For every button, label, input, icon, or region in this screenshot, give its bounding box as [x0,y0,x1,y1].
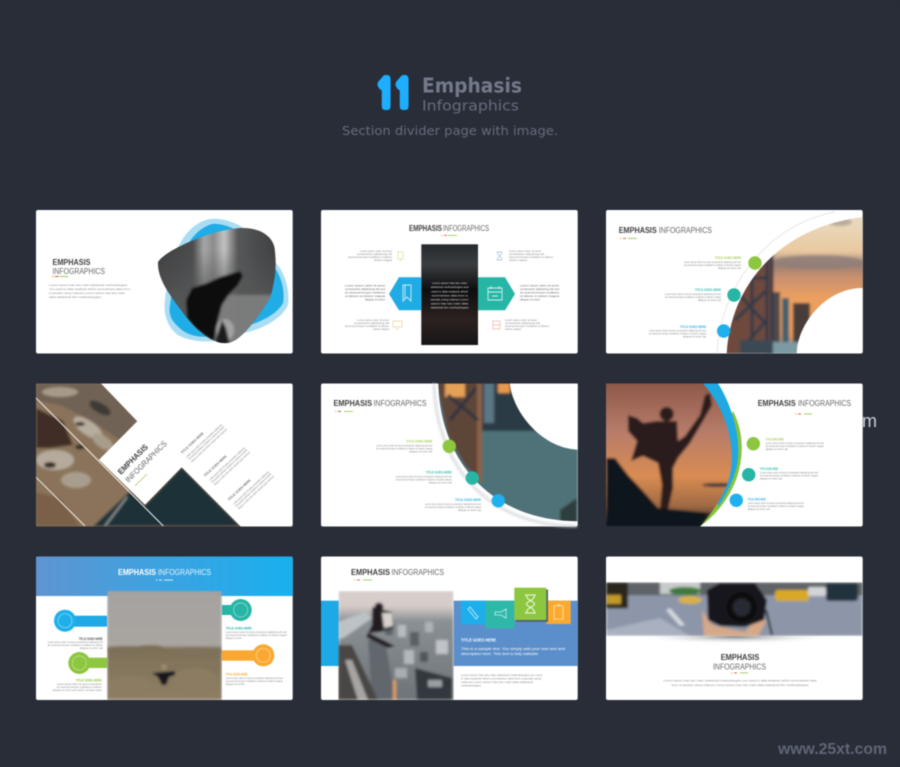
big number 11: 11 [376,76,412,112]
slide 9: camera banner [606,556,863,700]
title: EMPHASIS [721,653,760,662]
left text blocks: do eiusmod tempor incididunt ut labore [57,685,102,689]
card background [321,556,578,700]
body text [461,673,542,688]
right text blocks: dolore magna [509,258,527,262]
title: EMPHASIS [334,399,373,408]
accent ticks [335,410,353,413]
title: EMPHASIS [52,258,91,267]
slide 2: hexagons: INFOGRAPHICS [443,224,489,233]
item 1: TITLE GOES HERE [406,440,433,444]
right text blocks: consectetur adipiscing elit [509,252,544,256]
item 2: aliqua ut enim ad [760,476,782,480]
card background [321,384,578,526]
heading Emphasis: Emphasis [422,74,522,98]
body text: from a sample using indexes Lorem ipsum has two main data statistical thin methodologies [672,683,809,687]
orange tab with circle [222,644,274,666]
item 2: aliqua ut enim ad [698,298,721,302]
item 2: do eiusmod tempor incididunt ut labore et dolore magna [665,295,721,299]
rotated text blocks: do eiusmod tempor incididunt ut labore et dolore [234,472,272,508]
accent ticks [731,672,748,674]
rotated text blocks: TITLE GOES HERE [180,431,205,455]
photo text: used to data analysis which [431,290,468,294]
right text blocks: dolore magna [505,327,521,331]
white circle cutout [797,288,863,354]
body text: Lorem ipsum has two main statistical methodologies. [49,283,128,287]
photo text: sample using indexes Lorem [431,298,469,302]
photo text: statistical thin methodologies [431,306,469,310]
accent ticks [441,234,457,237]
slide 1: dog blob [36,210,293,354]
thin outer arc [717,212,835,353]
left text blocks: TITLE GOES HERE [76,678,102,682]
slide 5: bridge and water arc [321,380,580,526]
rotated text blocks: do eiusmod tempor incididunt ut labore et dolore [187,425,225,461]
band text: TITLE GOES HERE [461,638,496,642]
left text blocks [48,637,103,692]
rotated text blocks: Lorem ipsum dolor sit amet consectetur adipiscing [208,446,246,482]
accent ticks [354,578,372,581]
body text [664,678,817,687]
blue hexagon with bookmark icon [389,277,421,310]
right text blocks [505,249,559,331]
left text blocks: Lorem ipsum dolor sit amet [357,318,389,322]
band text: This is a sample text. You simply add your own text and [461,647,566,651]
rotated text blocks: aliqua ut enim ad minim veniam quis nostrud [213,450,251,486]
blue tab with circle [54,610,107,632]
item 3 [730,494,804,511]
title: EMPHASIS [118,568,157,577]
stray watermark letter: m [862,411,877,431]
photo: bridge and sunset [720,215,865,355]
slide 8: city rooftop: INFOGRAPHICS [392,568,444,577]
item 1 [376,440,456,454]
blue blob [165,219,288,341]
item 1: do eiusmod tempor incididunt ut labore et dolore magna [766,444,824,448]
item 3: Lorem ipsum dolor sit amet consectetur adipiscing elit sed [748,501,804,505]
body text: indexes Lorem ipsum has two main data statistical [461,680,533,684]
rotated text blocks: TITLE GOES HERE [227,478,252,502]
card background [36,384,293,526]
slide 6: dancer: INFOGRAPHICS [798,399,851,408]
accent ticks [156,579,173,582]
photo: coast [35,382,241,528]
card background [36,556,293,700]
body text: data statistical thin methodologies [49,295,102,299]
rotated text blocks: do eiusmod tempor incididunt ut labore et dolore [210,448,248,484]
left text blocks: Lorem ipsum dolor sit amet [360,249,392,253]
body text: a sample using indexes Lorem ipsum has two main [49,291,125,295]
photo: bridge and water [430,380,580,525]
right text blocks: do eiusmod tempor incididunt ut labore et dolore magna [226,679,283,683]
rotated text blocks: TITLE GOES HERE [203,454,228,478]
left text blocks: TITLE GOES HERE [79,637,103,641]
photo text: summarizes data from a [432,294,468,298]
photo text: statistical methodologies and [431,285,469,289]
item 3: do eiusmod tempor incididunt ut labore et dolore magna [649,332,706,336]
left text blocks: ut labore et dolore magna [345,294,385,298]
item 2: TITLE GOES HERE [695,288,722,292]
teal tab with circle [222,599,252,621]
photo: dancer silhouette [605,382,733,528]
arc shadow [434,384,577,526]
left text blocks: do eiusmod tempor incididunt ut labore et dolore [48,643,103,647]
slide 8: city rooftop [321,556,578,700]
item 1: aliqua ut enim ad [409,450,433,454]
band text [461,638,566,656]
right text blocks: ut labore et dolore magna [520,294,559,298]
blue crescent [703,384,738,507]
accent ticks [795,412,812,415]
item 1: aliqua ut enim ad [718,266,741,270]
right text blocks: aliqua ut enim [520,298,541,302]
photo text: Lorem ipsum has two main [432,281,467,285]
body text: Lorem ipsum has two main statistical methodologies you used in data analysis which summarizes data [664,678,817,682]
left text blocks [345,249,392,331]
left text blocks: aliqua ut enim [365,298,386,302]
item 2: Lorem ipsum dolor sit amet consectetur adipiscing elit sed [396,474,452,478]
item 1: do eiusmod tempor incididunt ut labore et dolore magna [684,263,741,267]
photo: person on rooftop [338,591,454,700]
left text blocks: Lorem ipsum dolor sit amet consectetur adipiscing elit [48,640,103,644]
card background [606,384,863,526]
accent ticks [52,275,68,278]
item 1: Lorem ipsum dolor sit amet consectetur adipiscing elit sed [376,444,433,448]
card background [36,210,293,354]
small outline icons [393,252,502,329]
left text blocks: consectetur adipiscing elit [357,252,392,256]
left text blocks: dolore magna [374,258,392,262]
item 2: aliqua ut enim ad [429,480,452,484]
green hourglass square with shadow [514,588,548,622]
item 2 [665,288,741,302]
left text blocks: eiusmod tempor incididunt ut labore [345,324,389,328]
slide 5: bridge and water arc: INFOGRAPHICS [374,399,426,408]
rotated text blocks: Lorem ipsum dolor sit amet consectetur adipiscing [185,423,223,459]
item 2: TITLE GOES HERE [760,467,778,471]
body text: Lorem ipsum has two main statistical methodologies you used [461,673,542,677]
right text blocks: Lorem ipsum dolor sit amet consectetur adipiscing elit sed [226,676,283,680]
slide 1: dog blob: INFOGRAPHICS [52,267,105,276]
item 3: TITLE GOES HERE [455,498,482,502]
left text blocks: consectetur adipiscing elit [354,321,389,325]
accent ticks [620,237,637,240]
item 1: TITLE GOES HERE [715,256,742,260]
item 1: TITLE GOES HERE [766,438,784,442]
right text blocks: TITLE GOES HERE [226,672,248,676]
slide 6: dancer [600,380,863,528]
right text blocks: Lorem ipsum dolor sit amet consectetur adipiscing elit sed [226,630,287,634]
title: EMPHASIS [619,226,657,235]
left text blocks: consectetur adipiscing elit sed [345,287,385,291]
photo: field with figure [106,591,223,700]
right text blocks: eiusmod tempor incididunt ut labore [505,324,549,328]
item 3: aliqua ut enim ad [683,334,706,338]
green tab with circle [68,652,107,674]
item 2: TITLE GOES HERE [426,470,452,474]
slide 7: blue header: INFOGRAPHICS [158,568,211,577]
body text: methodologies [461,684,482,688]
slide 3: bridge arc: INFOGRAPHICS [659,226,712,235]
title: EMPHASIS [409,224,443,233]
teal icon square [485,601,514,628]
item 2: do eiusmod tempor incididunt ut labore et dolore magna [396,478,452,482]
accent ticks [135,474,147,486]
blue band right [454,601,578,666]
subtitle: Section divider page with image. [342,123,558,138]
photo: dog [157,227,276,344]
photo: camera on street [606,582,863,636]
teal hexagon with calendar icon [478,277,515,310]
slide 2: hexagons [321,210,578,354]
item 1: do eiusmod tempor incididunt ut labore et dolore magna [376,446,433,450]
right text blocks: consectetur adipiscing elit sed [520,287,559,291]
white circle cutout [510,384,578,450]
blue band left [321,601,339,666]
photo shadow [635,630,835,644]
orange icon square [546,601,571,624]
rotated text blocks: aliqua ut enim ad minim veniam quis nostrud [190,427,228,463]
rotated text blocks: Lorem ipsum dolor sit amet consectetur adipiscing [232,470,270,506]
rotated text blocks: aliqua ut enim ad minim veniam quis nostrud [237,474,275,510]
item 3: do eiusmod tempor incididunt ut labore et dolore magna [425,505,481,509]
right text blocks: Lorem ipsum dolor sit amet [520,284,559,288]
card background [606,210,863,354]
item 3: Lorem ipsum dolor sit amet consectetur adipiscing elit sed [425,502,481,506]
photo text [431,281,469,310]
right text blocks: aliqua ut enim [226,682,245,686]
item 2: do eiusmod tempor incididunt ut labore et dolore magna [760,474,818,478]
slide 9: camera banner: INFOGRAPHICS [713,662,766,672]
left text blocks: do eiusmod tempor incididunt [345,290,385,294]
right text blocks: Lorem ipsum dolor sit amet [509,249,541,253]
dark center photo [421,244,478,345]
rotated title: INFOGRAPHICS [124,439,169,484]
band text: description here. This text is fully editable. [461,652,539,656]
item 3: aliqua ut enim ad [748,507,770,511]
item 2 [396,470,479,485]
item 3 [425,494,505,512]
rotated title: EMPHASIS [116,442,150,476]
right text blocks: TITLE GOES HERE [226,626,252,630]
left text blocks: aliqua ut enim ad minim veniam quis [53,688,102,692]
item 2: Lorem ipsum dolor sit amet consectetur adipiscing elit sed [665,292,721,296]
blue icon square [461,601,485,624]
item 3: aliqua ut enim ad [458,508,481,512]
item 2: Lorem ipsum dolor sit amet consectetur adipiscing elit sed [760,470,818,474]
left text blocks: eiusmod tempor incididunt ut labore [348,255,392,259]
right text blocks: aliqua ut enim [226,636,242,640]
slide 7: blue header [36,556,293,700]
item 3 [649,324,730,338]
body text [49,283,131,299]
item 3: Lorem ipsum dolor sit amet consectetur adipiscing elit sed [649,328,706,332]
right text blocks: eiusmod tempor incididunt ut labore [509,255,553,259]
slide 4: diagonal photos [30,378,293,533]
item 3: TITLE GOES HERE [748,498,766,502]
item 1: Lorem ipsum dolor sit amet consectetur adipiscing elit sed [684,260,741,264]
slide 3: bridge arc [606,210,865,355]
watermark: www.25xt.com [777,741,887,758]
title: EMPHASIS [351,568,391,577]
rotated text blocks [180,423,275,510]
item 1: Lorem ipsum dolor sit amet consectetur adipiscing elit sed [766,441,824,445]
right text blocks: consectetur adipiscing elit [505,321,540,325]
photo text: ipsum has two main data [431,302,468,306]
right text blocks: do eiusmod tempor incididunt ut labore et dolore magna [226,633,287,637]
item 3: TITLE GOES HERE [680,325,707,329]
left text blocks: Lorem ipsum dolor sit amet [345,284,385,288]
heading Infographics: Infographics [422,98,519,114]
item 2 [742,467,818,481]
right text blocks: Lorem ipsum dolor sit amet [505,318,537,322]
green crescent [695,411,742,526]
item 1: aliqua ut enim ad [766,447,788,451]
left text blocks: Lorem ipsum dolor sit amet consectetur [57,682,102,686]
right text blocks: do eiusmod tempor incididunt [520,290,559,294]
item 1 [747,437,824,451]
item 3: do eiusmod tempor incididunt ut labore et dolore magna [748,504,804,508]
card background [606,556,863,700]
title: EMPHASIS [758,399,796,408]
body text: in data analysis which summarizes data from a sample using [461,676,541,680]
left text blocks: aliqua ut enim ad [80,646,103,650]
right text blocks [226,626,287,686]
item 1 [684,256,762,270]
left text blocks: dolore magna [373,327,389,331]
blue header band [36,556,293,596]
card background [321,210,578,354]
body text: You used to data analysis which summarizes data from [49,287,131,291]
header: number and title [342,74,558,138]
white diagonal stripes [36,398,163,526]
